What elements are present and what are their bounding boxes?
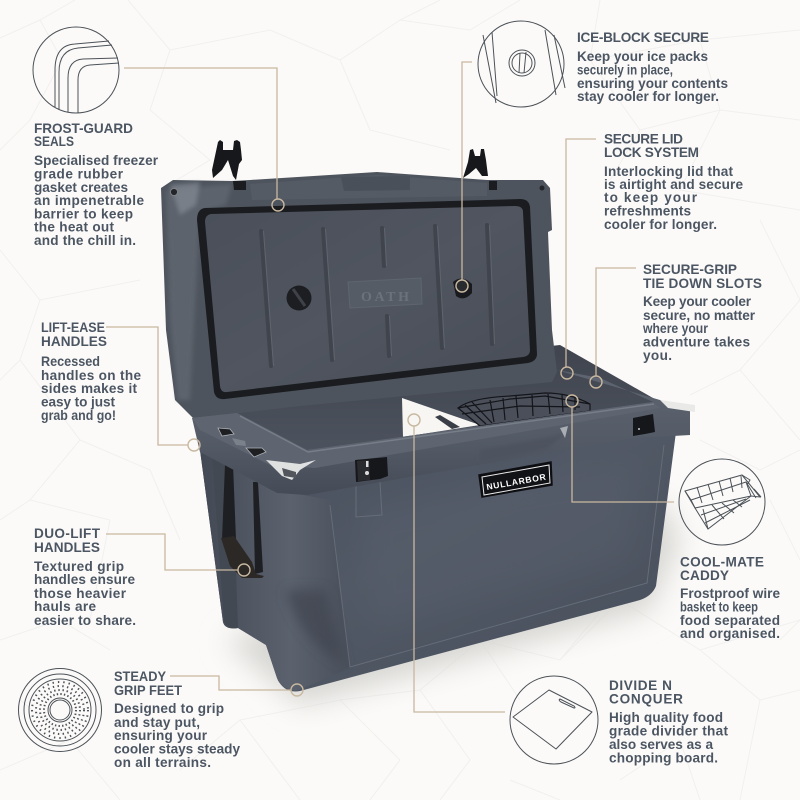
text: duo-lift handles: hauls are: [34, 599, 96, 614]
text: duo-lift handles: HANDLES: [34, 540, 100, 555]
text: lift-ease handles: [41, 320, 141, 423]
text: steady grip feet: on all terrains.: [114, 755, 211, 770]
panel: steady grip feet: [18, 668, 240, 770]
rubber gasket: [197, 199, 537, 399]
connector: cool-mate caddy: [566, 395, 674, 502]
text: divide n conquer: [609, 678, 728, 766]
text: ice-block secure: stay cooler for longer.: [577, 89, 719, 104]
text: frost-guard seals: an impenetrable: [34, 193, 144, 208]
left lid knob: [286, 286, 312, 310]
text: cool-mate caddy: Frostproof wire: [680, 586, 780, 601]
wire basket in cooler: [458, 393, 590, 426]
text: secure lid lock system: LOCK SYSTEM: [604, 145, 699, 160]
connector: secure lid lock: [561, 139, 596, 379]
text: divide n conquer: also serves as a: [609, 737, 713, 752]
text: duo-lift handles: DUO-LIFT: [34, 526, 101, 541]
text: ice-block secure: Keep your ice packs: [577, 49, 708, 64]
text: steady grip feet: GRIP FEET: [114, 683, 183, 698]
cooler rim: [192, 370, 695, 495]
left lid hinge: [212, 140, 246, 190]
connector: frost-guard seals: [124, 68, 284, 211]
text: secure lid lock system: to keep your: [604, 190, 698, 205]
cooler interior: [193, 345, 660, 452]
icon: textured foot: [18, 668, 102, 752]
text: secure-grip tie down slots: adventure takes: [643, 334, 750, 350]
right lid hinge: [463, 149, 497, 190]
text: secure-grip tie down slots: SECURE-GRIP: [643, 262, 737, 277]
front right latch: [633, 414, 655, 436]
cooler illustration: [161, 140, 695, 691]
text: lift-ease handles: grab and go!: [41, 408, 116, 423]
lid logo plate: [348, 278, 422, 308]
text: secure-grip tie down slots: TIE DOWN SLOTS: [643, 276, 762, 291]
text: steady grip feet: STEADY: [114, 669, 166, 684]
text: duo-lift handles: [34, 526, 136, 628]
panel: cool-mate caddy: [679, 459, 780, 641]
text: frost-guard seals: the heat out: [34, 220, 114, 234]
text: secure-grip tie down slots: where your: [642, 321, 709, 336]
text: steady grip feet: Designed to grip: [114, 701, 224, 716]
floor shadow under cooler: [225, 500, 680, 705]
front left latch: [355, 457, 388, 482]
text: divide n conquer: grade divider that: [609, 724, 728, 738]
food divider in cooler: [402, 398, 480, 437]
text: cool-mate caddy: [680, 554, 780, 641]
callout connectors and anchor rings: [106, 62, 674, 712]
text: divide n conquer: CONQUER: [609, 692, 683, 706]
text: lift-ease handles: sides makes it: [41, 381, 137, 396]
connector: lift-ease handles: [106, 327, 200, 451]
brand badge: NULLARBOR: [486, 472, 547, 492]
text: secure lid lock system: is airtight and secure: [604, 177, 743, 192]
text: secure-grip tie down slots: secure, no matter: [643, 308, 756, 323]
text: ice-block secure: [577, 30, 728, 104]
lid: [161, 172, 557, 418]
text: frost-guard seals: FROST-GUARD: [34, 121, 133, 136]
text: ice-block secure: ICE-BLOCK SECURE: [577, 30, 709, 45]
connector: steady grip feet: [170, 676, 303, 696]
text: duo-lift handles: those heavier: [34, 586, 127, 601]
lid logo plate: OATH: [361, 290, 409, 305]
text: frost-guard seals: grade rubber: [34, 166, 124, 182]
text: lift-ease handles: easy to just: [41, 394, 115, 410]
icon: wire basket: [679, 459, 765, 545]
text: steady grip feet: and stay put,: [114, 715, 200, 730]
text: divide n conquer: chopping board.: [609, 750, 718, 766]
cooler body: [200, 432, 676, 691]
text: ice-block secure: ensuring your contents: [577, 76, 728, 91]
text: frost-guard seals: Specialised freezer: [34, 153, 159, 168]
text: steady grip feet: [114, 669, 240, 770]
text: frost-guard seals: barrier to keep: [34, 206, 133, 222]
lid ribs: [261, 225, 492, 366]
text: lift-ease handles: LIFT-EASE: [41, 320, 105, 335]
side handle: [221, 464, 264, 578]
text: cool-mate caddy: CADDY: [680, 568, 729, 583]
text: duo-lift handles: Textured grip: [34, 559, 124, 574]
brand badge: [479, 462, 552, 497]
text: secure-grip tie down slots: you.: [643, 348, 672, 363]
text: ice-block secure: securely in place,: [577, 62, 673, 78]
icon: seal corner: [33, 27, 119, 113]
icon: ice pack knob: [478, 21, 565, 107]
text: duo-lift handles: easier to share.: [34, 613, 136, 628]
connector: duo-lift handles: [106, 534, 250, 576]
connector: divide n conquer: [408, 414, 505, 712]
text: lift-ease handles: HANDLES: [41, 334, 107, 349]
text: secure-grip tie down slots: [642, 262, 762, 363]
text: secure lid lock system: SECURE LID: [604, 132, 683, 146]
text: frost-guard seals: SEALS: [34, 134, 74, 149]
panel: divide n conquer: [510, 676, 728, 766]
text: frost-guard seals: and the chill in.: [34, 233, 136, 248]
icon: chopping board: [510, 676, 598, 764]
text: frost-guard seals: gasket creates: [34, 180, 128, 195]
text: steady grip feet: cooler stays steady: [114, 742, 240, 756]
connector: tie down slots: [590, 268, 636, 388]
panel: ice-block secure: [478, 21, 728, 107]
text: frost-guard seals: [34, 121, 159, 248]
text: cool-mate caddy: basket to keep: [680, 600, 758, 614]
text: secure lid lock system: Interlocking lid that: [604, 164, 733, 179]
text: cool-mate caddy: food separated: [680, 613, 780, 628]
text: secure lid lock system: cooler for longer.: [604, 217, 717, 232]
text: secure lid lock system: [604, 132, 743, 232]
text: lift-ease handles: Recessed: [41, 354, 100, 369]
text: divide n conquer: High quality food: [609, 710, 723, 725]
text: cool-mate caddy: and organised.: [680, 626, 780, 641]
text: cool-mate caddy: COOL-MATE: [680, 554, 764, 570]
text: steady grip feet: ensuring your: [114, 728, 208, 743]
panel: frost-guard seals: [33, 27, 159, 248]
text: secure lid lock system: refreshments: [604, 204, 691, 218]
connector: ice-block secure: [456, 62, 472, 292]
text: duo-lift handles: handles ensure: [34, 572, 135, 587]
right lid knob: [453, 278, 472, 298]
lid inner panel: [205, 206, 530, 392]
text: secure-grip tie down slots: Keep your cooler: [643, 294, 752, 309]
text: divide n conquer: DIVIDE N: [609, 678, 672, 693]
text: lift-ease handles: handles on the: [41, 368, 141, 383]
